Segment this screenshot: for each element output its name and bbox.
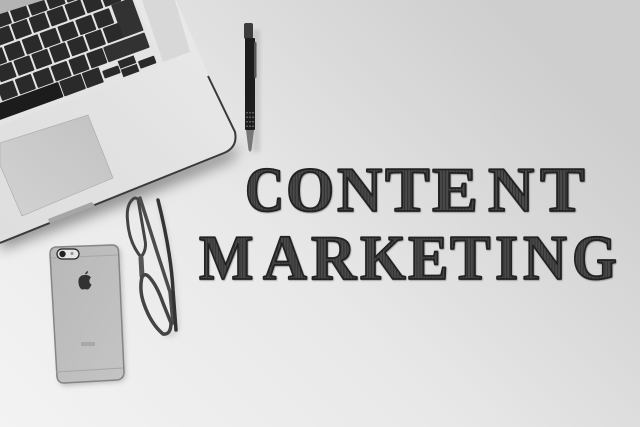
laptop <box>0 0 240 250</box>
heading: MARKETING: M <box>199 223 253 294</box>
phone camera <box>57 249 79 259</box>
heading: MARKETING: N <box>523 222 567 293</box>
keyboard <box>0 0 156 120</box>
temple arm inner <box>140 198 173 323</box>
speaker grille <box>142 0 190 62</box>
camera flash <box>70 252 74 255</box>
trackpad <box>0 115 113 216</box>
heading: CONTENT: C <box>245 154 284 225</box>
laptop body <box>0 0 236 243</box>
heading: CONTENT: N <box>488 154 534 225</box>
lower lens <box>141 275 171 334</box>
phone body <box>50 245 124 383</box>
heading: MARKETING: K <box>360 223 406 294</box>
heading: CONTENT: T <box>540 155 585 226</box>
heading: MARKETING: G <box>572 223 617 294</box>
phone <box>50 245 126 386</box>
bridge <box>141 258 142 276</box>
heading: MARKETING: A <box>263 222 307 293</box>
pen <box>244 23 260 152</box>
pen clip <box>254 42 256 78</box>
heading: MARKETING <box>199 222 617 294</box>
heading: CONTENT: T <box>385 155 430 226</box>
laptop edge <box>0 76 236 243</box>
heading: MARKETING: T <box>450 222 491 293</box>
pen barrel <box>245 38 255 130</box>
temple arm outer <box>158 200 176 330</box>
pen tip <box>246 130 254 152</box>
phone bands <box>51 255 123 372</box>
heading: MARKETING: R <box>311 222 358 293</box>
heading: MARKETING: I <box>495 223 518 293</box>
pen grip bands <box>247 112 253 127</box>
heading: CONTENT: O <box>286 154 334 225</box>
glasses <box>127 198 178 335</box>
heading: CONTENT <box>245 154 585 226</box>
heading: CONTENT: N <box>337 154 382 225</box>
lid notch <box>48 202 95 224</box>
upper lens <box>127 198 146 257</box>
heading: MARKETING: E <box>408 222 449 293</box>
camera lens <box>59 251 66 257</box>
phone label <box>81 342 95 346</box>
icon: apple logo <box>78 271 92 290</box>
heading: CONTENT: E <box>432 155 478 225</box>
pen clicker <box>244 23 253 39</box>
